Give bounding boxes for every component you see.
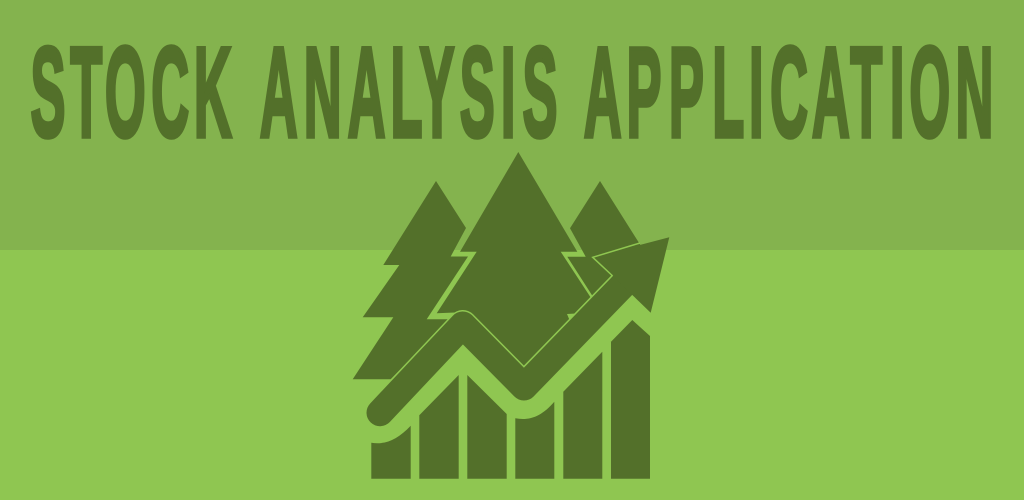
title: ANALYSIS <box>260 20 558 164</box>
bar 4 <box>515 402 554 479</box>
title: STOCK <box>31 20 232 164</box>
bottom background band <box>0 250 1024 500</box>
bar chart <box>371 320 650 479</box>
arrow head <box>593 237 669 313</box>
bar 3 <box>467 375 507 479</box>
arrow head back edge <box>593 243 640 276</box>
bar 6 <box>611 320 650 479</box>
bar 5 <box>563 352 602 479</box>
icon: rising arrow <box>380 237 669 413</box>
icon: right tree <box>567 181 641 296</box>
top background band <box>0 0 1024 250</box>
icon: trees with rising stock chart <box>353 152 669 479</box>
bar 1 <box>371 426 411 479</box>
title <box>31 20 993 164</box>
bar 2 <box>419 375 459 479</box>
icon: center tree <box>437 152 591 368</box>
title: APPLICATION <box>584 20 993 164</box>
arrow shaft outline <box>380 286 622 413</box>
arrow shaft <box>380 286 622 413</box>
icon: left tree <box>353 181 468 379</box>
